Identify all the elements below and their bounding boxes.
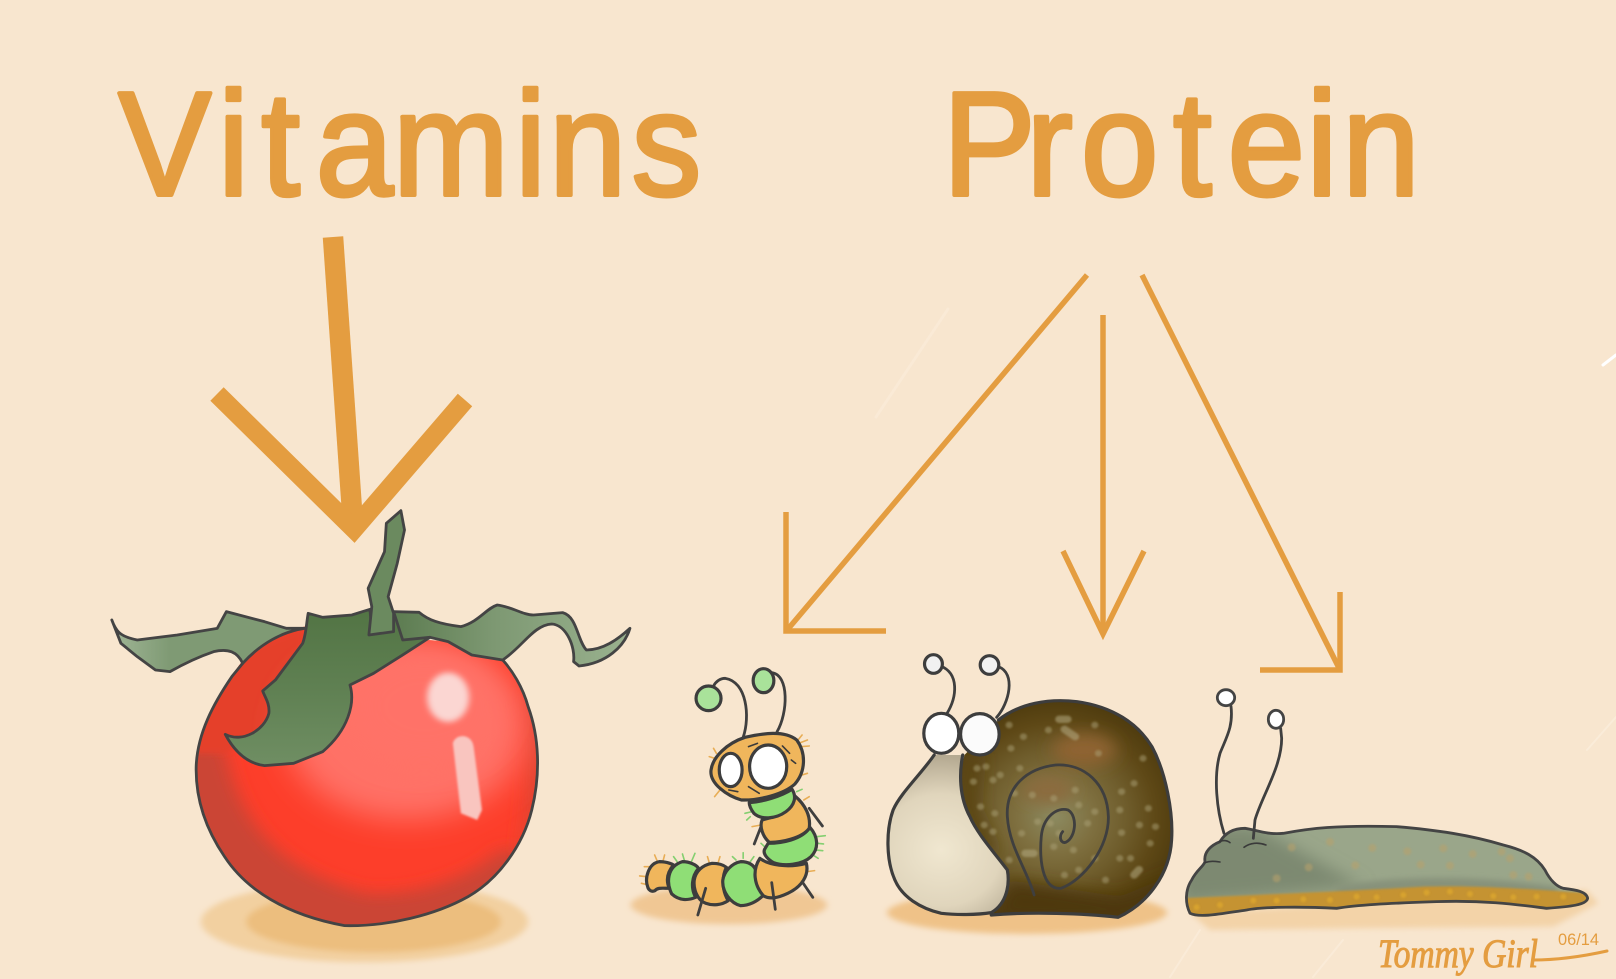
signature: Tommy Girl xyxy=(1378,931,1538,976)
snail eye stalks xyxy=(925,655,1009,717)
illustration: tomato xyxy=(112,511,630,962)
caterpillar hairs xyxy=(640,735,825,885)
caterpillar shadow xyxy=(631,886,827,924)
slug shadow xyxy=(1190,890,1598,930)
snail body xyxy=(888,755,1008,914)
caterpillar head xyxy=(711,733,803,800)
shell spiral xyxy=(1007,765,1108,895)
title: Protein: Protein xyxy=(943,62,1420,227)
slug spots xyxy=(1277,842,1529,878)
arrow: vitamins to tomato xyxy=(217,237,465,529)
slug tentacles xyxy=(1216,690,1284,838)
title: Vitamins: Vitamins xyxy=(118,62,701,227)
illustration: caterpillar xyxy=(631,669,827,924)
stem xyxy=(368,511,405,635)
tomato shadow xyxy=(201,881,528,962)
slug body xyxy=(1180,826,1593,927)
snail shadow xyxy=(887,891,1167,934)
caterpillar segments xyxy=(647,789,817,906)
central sepal xyxy=(225,609,430,766)
snail shell xyxy=(959,701,1177,927)
tomato body xyxy=(194,626,539,928)
right sepal xyxy=(381,605,630,666)
paper streaks xyxy=(876,309,1616,977)
snail eyes xyxy=(924,713,999,755)
arrow: protein to caterpillar xyxy=(786,275,1087,631)
arrow: protein to snail xyxy=(1063,315,1144,634)
shell spots xyxy=(973,725,1156,880)
illustration: slug xyxy=(1180,690,1598,930)
date: 06/14 xyxy=(1558,930,1599,949)
illustration: snail xyxy=(887,655,1177,934)
caterpillar antennae xyxy=(696,669,785,737)
left sepal xyxy=(112,612,305,672)
caterpillar legs xyxy=(698,808,822,915)
arrow: protein to slug xyxy=(1142,275,1340,670)
